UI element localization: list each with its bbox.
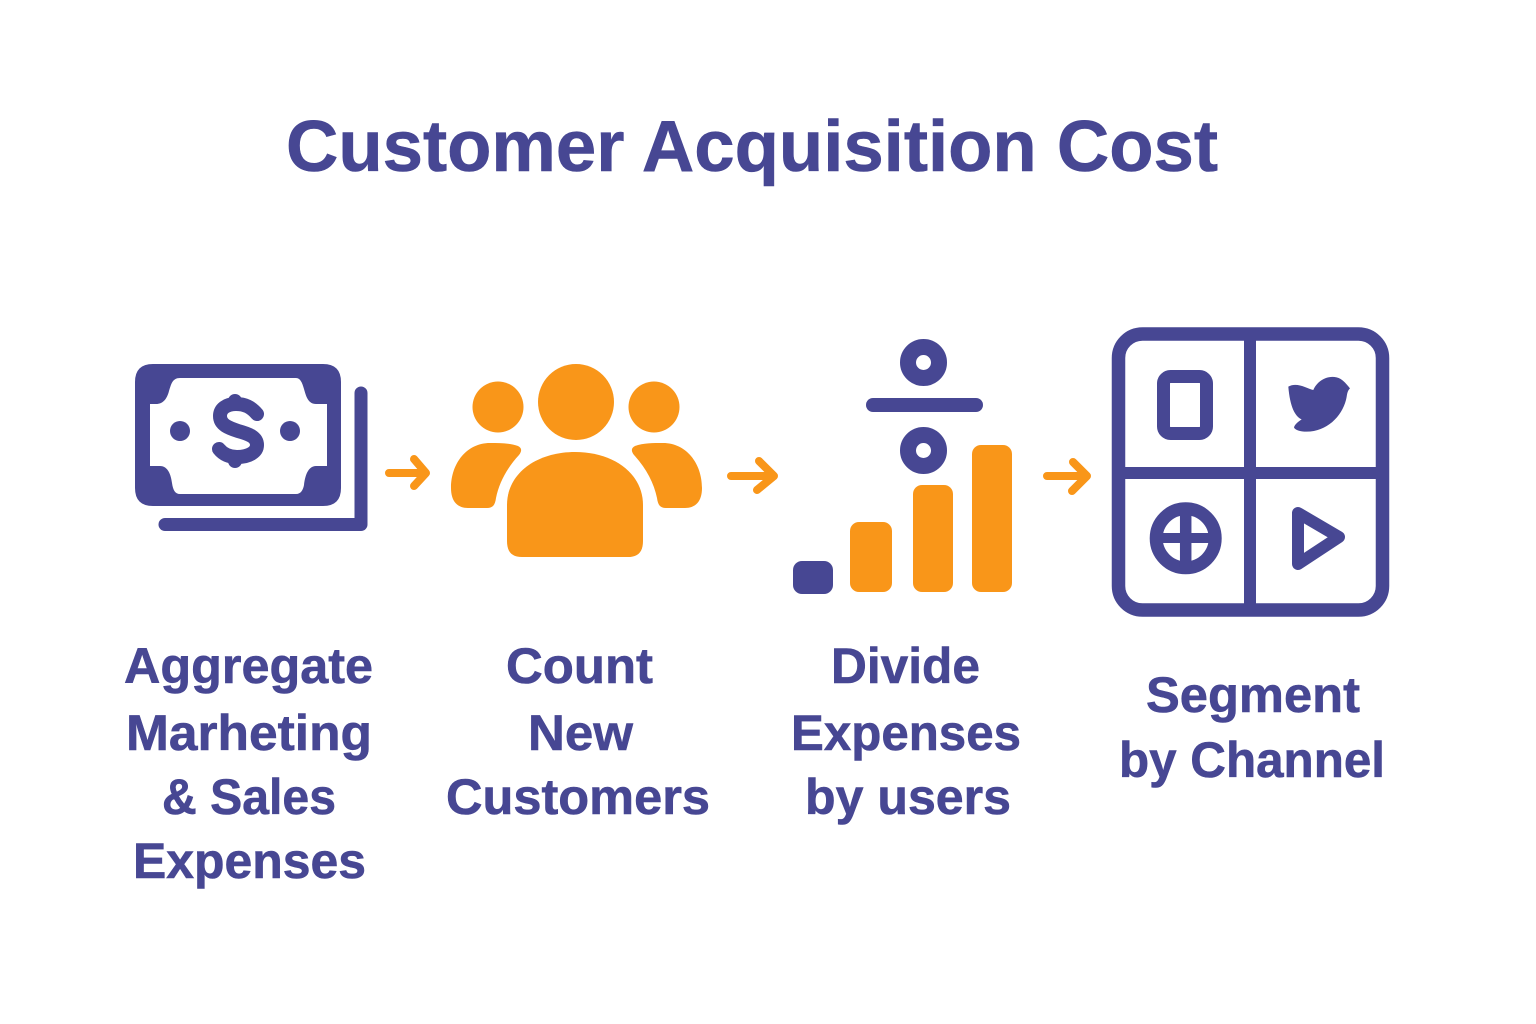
division symbol xyxy=(866,347,983,466)
title: Customer Acquisition Cost xyxy=(286,107,1218,187)
banknote dots xyxy=(170,421,300,441)
label: count new customers: New xyxy=(528,705,633,761)
arrow 3 xyxy=(1047,462,1087,491)
label: segment by channel: by Channel xyxy=(1119,732,1385,788)
label: segment by channel: Segment xyxy=(1146,667,1360,723)
icon: phone xyxy=(1164,376,1206,434)
label: aggregate marketing and sales expenses: Expenses xyxy=(133,833,366,889)
icon: channel grid xyxy=(1118,334,1383,610)
label: divide expenses by users: Expenses xyxy=(791,705,1021,761)
label: segment by channel xyxy=(1119,667,1385,788)
icon: globe xyxy=(1156,509,1215,568)
arrow 2 xyxy=(731,461,774,490)
label: aggregate marketing and sales expenses: & Sales xyxy=(162,769,336,825)
label: divide expenses by users: Divide xyxy=(831,638,980,694)
label: aggregate marketing and sales expenses: Marheting xyxy=(126,705,372,761)
label: divide expenses by users: by users xyxy=(805,769,1011,825)
icon: stacked banknote xyxy=(135,364,361,524)
orange bars xyxy=(850,445,1012,592)
back note edge xyxy=(165,393,361,524)
icon: division with bars xyxy=(793,347,1012,594)
label: count new customers xyxy=(446,638,710,825)
label: divide expenses by users xyxy=(791,638,1021,825)
label: aggregate marketing and sales expenses: Aggregate xyxy=(124,638,373,694)
label: count new customers: Customers xyxy=(446,769,710,825)
icon: play triangle xyxy=(1298,513,1339,564)
navy bar xyxy=(793,561,833,594)
label: aggregate marketing and sales expenses xyxy=(124,638,373,889)
arrow 1 xyxy=(389,459,426,486)
icon: bird xyxy=(1288,377,1350,432)
banknote body xyxy=(135,364,341,506)
label: count new customers: Count xyxy=(506,638,653,694)
dollar sign xyxy=(219,401,257,461)
grid frame xyxy=(1118,334,1383,610)
icon: group of customers xyxy=(451,364,702,557)
